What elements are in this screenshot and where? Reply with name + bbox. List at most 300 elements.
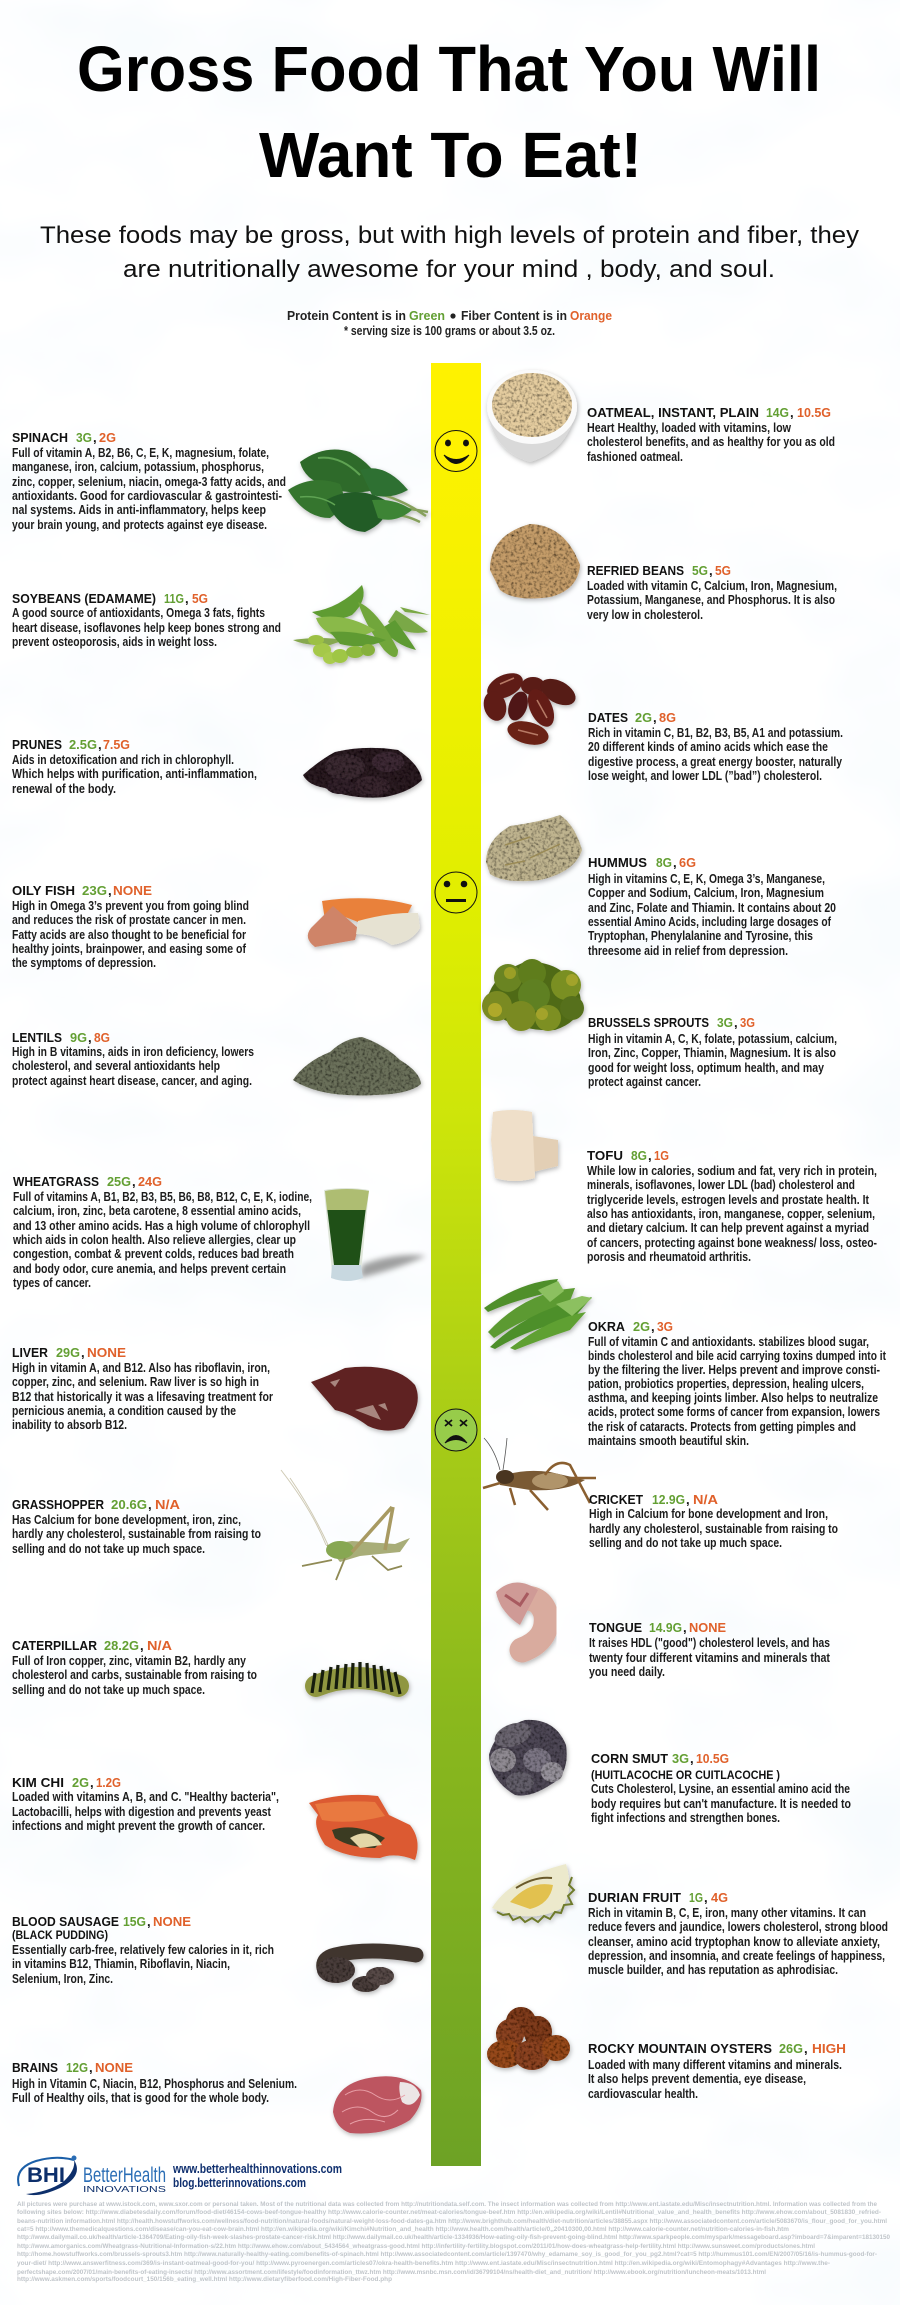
- heading: brussels sprouts: ,: [734, 1015, 738, 1030]
- text: oily fish: healthy joints, brainpower, and easing some of: [12, 942, 247, 956]
- heading: dates: 8G: [659, 710, 676, 725]
- text: durian: muscle builder, and has reputation as aphrodisiac.: [588, 1963, 838, 1977]
- heading: okra: [588, 1319, 673, 1334]
- heading: wheatgrass: 24G: [138, 1174, 162, 1189]
- heading: rocky mountain oysters: ROCKY MOUNTAIN OYSTERS: [588, 2041, 772, 2056]
- text: hummus: Copper and Sodium, Calcium, Iron, Magnesium: [588, 886, 824, 900]
- icon: cricket: [483, 1438, 596, 1510]
- text: okra: maintains smooth beautiful skin.: [588, 1434, 749, 1448]
- text: oily fish: Fatty acids are also thought to be beneficial for: [12, 928, 246, 942]
- website links: www.betterhealthinnovations.com: [172, 2161, 342, 2176]
- heading: liver: ,: [81, 1345, 85, 1360]
- sources fine print: All pictures were purchase at www.istock.com, www.sxor.com or personal taken. Most of the nutritional data was collected from http://nutritiondata.self.com. The insect information was collected from http://www.ent.iastate.edu/Misc/insectnutrition.html. Information was collected from the: [17, 2201, 877, 2208]
- heading: prunes: ,: [98, 737, 102, 752]
- legend: * serving size is 100 grams or about 3.5 oz.: [344, 324, 555, 338]
- text: lentils: cholesterol, and several antioxidants help: [12, 1059, 220, 1073]
- panel: oily fish: [12, 883, 420, 970]
- heading: oily fish: 23G: [82, 883, 107, 898]
- text: kim chi: Loaded with vitamins A, B, and C. "Healthy bacteria",: [12, 1790, 279, 1804]
- text: liver: inability to absorb B12.: [12, 1418, 127, 1432]
- panel: hummus: [486, 815, 836, 958]
- sources fine print: cat=5 http://www.themedicalquestions.com/disease/can-you-eat-cow-brain.html http://en.wikipedia.org/wiki/Kimchi#Nutrition_and_health http://www.health.com/health/article/0,,20410300,00.html http://www.calorie-counter.net/nutrition-calories-in-fish.htm: [17, 2226, 789, 2233]
- heading: corn smut: 3G: [672, 1751, 689, 1766]
- text: blood sausage: Essentially carb-free, relatively few calories in it, rich: [12, 1943, 274, 1957]
- logo: Better Health Innovations: BHI: [27, 2164, 65, 2187]
- heading: oatmeal: 10.5G: [797, 405, 831, 420]
- heading: blood sausage: [12, 1914, 191, 1942]
- text: caterpillar: [12, 1654, 257, 1697]
- heading: liver: NONE: [87, 1345, 126, 1360]
- heading: lentils: LENTILS: [12, 1030, 62, 1045]
- heading: dates: [588, 710, 676, 725]
- heading: spinach: ,: [93, 430, 97, 445]
- heading: liver: LIVER: [12, 1345, 49, 1360]
- text: blood sausage: in vitamins B12, Thiamin, Riboflavin, Niacin,: [12, 1957, 230, 1971]
- title: Gross Food That You Will: [77, 33, 821, 105]
- panel: oatmeal: [487, 370, 835, 464]
- text: liver: copper, zinc, and selenium. Raw liver is so high in: [12, 1375, 259, 1389]
- heading: brains: [12, 2060, 133, 2075]
- text: brussels sprouts: Iron, Zinc, Copper, Thiamin, Magnesium. It is also: [588, 1046, 836, 1060]
- panel: spinach: [12, 430, 428, 532]
- text: grasshopper: selling and do not take up much space.: [12, 1542, 205, 1556]
- sources fine print: http://www.askmen.com/sports/foodcourt_150/156b_eating_well.html http://www.dietaryfiberfood.com/High-Fiber-Food.php: [17, 2276, 392, 2283]
- text: caterpillar: cholesterol and carbs, sustainable from raising to: [12, 1668, 257, 1682]
- sources fine print: following sites below: http://www.diabetesdaily.com/forum/food-diet/46154-cows-beef-tongue-healthy http://www.calorie-counter.net/meat-calories/tongue-beef.htm http://en.wikipedia.org/wiki/Lentil#Nutritional_value_and_health_benefits http://www.ehow.com/about_5081830_refried-: [17, 2209, 881, 2216]
- heading: refried beans: REFRIED BEANS: [587, 563, 684, 578]
- panel: brains: [12, 2060, 422, 2133]
- icon: kim chi: [309, 1795, 418, 1860]
- heading: spinach: 2G: [99, 430, 116, 445]
- heading: tongue: NONE: [689, 1620, 726, 1635]
- heading: prunes: PRUNES: [12, 737, 62, 752]
- text: corn smut: fight infections and strengthen bones.: [591, 1811, 780, 1825]
- text: dates: Rich in vitamin C, B1, B2, B3, B5, A1 and potassium.: [588, 726, 843, 740]
- heading: caterpillar: [12, 1638, 173, 1653]
- text: soybeans: A good source of antioxidants, Omega 3 fats, fights: [12, 606, 265, 620]
- heading: grasshopper: N/A: [155, 1497, 181, 1512]
- icon: corn smut: [489, 1718, 567, 1796]
- text: prunes: renewal of the body.: [12, 782, 116, 796]
- icon: tofu: [491, 1110, 558, 1181]
- icon: fish: [308, 898, 420, 947]
- heading: blood sausage: BLOOD SAUSAGE: [12, 1914, 119, 1929]
- heading: blood sausage: ,: [147, 1914, 151, 1929]
- heading: lentils: 9G: [70, 1030, 87, 1045]
- text: spinach: Full of vitamin A, B2, B6, C, E, K, magnesium, folate,: [12, 446, 269, 460]
- text: brains: [12, 2077, 297, 2105]
- heading: lentils: [12, 1030, 110, 1045]
- text: dates: 20 different kinds of amino acids which ease the: [588, 740, 828, 754]
- icon: lentils: [293, 1037, 421, 1095]
- sources fine print: http://home.howstuffworks.com/brussels-sprouts3.htm http://www.naturally-healthy-eating.com/benefits-of-spinach.html http://www.associatedcontent.com/article/1397470/why_edamame_soy_is_good_for_you_pg2.html?cat=5 http://hummus101.com/EN/2007/05/16/is-hummus-good-for-: [17, 2251, 877, 2258]
- text: wheatgrass: [12, 1190, 312, 1290]
- text: wheatgrass: Full of vitamins A, B1, B2, B3, B5, B6, B8, B12, C, E, K, iodine,: [13, 1190, 312, 1204]
- heading: blood sausage: (BLACK PUDDING): [12, 1930, 108, 1942]
- panel: durian: [492, 1864, 888, 1977]
- icon: durian: [492, 1864, 574, 1922]
- text: tongue: you need daily.: [589, 1665, 665, 1679]
- text: oily fish: [12, 899, 249, 970]
- text: kim chi: infections and might prevent the growth of cancer.: [12, 1819, 265, 1833]
- heading: tongue: 14.9G: [649, 1620, 682, 1635]
- heading: blood sausage: NONE: [153, 1914, 191, 1929]
- heading: tofu: 8G: [631, 1148, 647, 1163]
- text: soybeans: heart disease, isoflavones help keep bones strong and: [12, 621, 281, 635]
- heading: cricket: 12.9G: [652, 1492, 685, 1507]
- heading: wheatgrass: [13, 1174, 162, 1189]
- icon: rocky mountain oysters: [487, 2007, 570, 2070]
- text: tongue: It raises HDL ("good") cholesterol levels, and has: [589, 1636, 830, 1650]
- heading: oily fish: NONE: [113, 883, 152, 898]
- text: cricket: High in Calcium for bone development and Iron,: [589, 1507, 828, 1521]
- heading: oily fish: [12, 883, 152, 898]
- heading: corn smut: ,: [690, 1751, 694, 1766]
- heading: wheatgrass: 25G: [107, 1174, 131, 1189]
- panel: brussels sprouts: [482, 959, 837, 1089]
- sources fine print: http://www.dailymail.co.uk/health/article-1364709/Eating-oily-fish-week-slashes-prostate-cancer-risk.html http://www.dailymail.co.uk/health/article-1334936/How-eating-oily-fish-prevent-going-blind.html http://www.sparkpeople.com/myspark/messageboard.asp?imboard=7&imparent=18130150: [17, 2234, 890, 2241]
- text: lentils: protect against heart disease, cancer, and aging.: [12, 1074, 252, 1088]
- text: brussels sprouts: [588, 1032, 837, 1089]
- text: spinach: manganese, iron, calcium, potassium, phosphorus,: [12, 460, 264, 474]
- legend: Orange: [570, 309, 612, 323]
- heading: refried beans: 5G: [715, 563, 731, 578]
- icon: dates: [480, 668, 580, 749]
- sources fine print: perfectshape.com/2007/01/main-benefits-of-eating-insects/ http://www.assortment.com/lifestyle/foodinformation_ttwz.htm http://www.msnbc.msn.com/id/36799104/ns/health-diet_and_nutrition/ http://www.ebook.org/nutrition/luncheon-meats/1013.html: [17, 2269, 766, 2276]
- heading: lentils: 8G: [94, 1030, 110, 1045]
- heading: caterpillar: CATERPILLAR: [12, 1638, 98, 1653]
- heading: oatmeal: ,: [790, 405, 794, 420]
- text: lentils: High in B vitamins, aids in iron deficiency, lowers: [12, 1045, 254, 1059]
- heading: brains: 12G: [66, 2060, 88, 2075]
- panel: rocky mountain oysters: [487, 2007, 846, 2101]
- text: refried beans: very low in cholesterol.: [587, 608, 703, 622]
- heading: spinach: [12, 430, 116, 445]
- heading: dates: ,: [653, 710, 657, 725]
- panel: prunes: [12, 737, 422, 798]
- legend: Fiber Content is in: [461, 309, 567, 323]
- icon: tongue: [496, 1582, 546, 1650]
- icon: edamame: [293, 585, 430, 664]
- heading: prunes: [12, 737, 130, 752]
- heading: oatmeal: [587, 405, 831, 420]
- heading: okra: 3G: [657, 1319, 673, 1334]
- heading: lentils: ,: [88, 1030, 92, 1045]
- heading: brussels sprouts: BRUSSELS SPROUTS: [588, 1015, 709, 1030]
- heading: durian: ,: [704, 1890, 708, 1905]
- heading: soybeans: 11G: [164, 591, 184, 606]
- heading: soybeans: 5G: [192, 591, 208, 606]
- heading: tofu: TOFU: [587, 1148, 623, 1163]
- heading: blood sausage: 15G: [123, 1914, 146, 1929]
- heading: caterpillar: N/A: [147, 1638, 173, 1653]
- heading: corn smut: 10.5G: [696, 1751, 729, 1766]
- text: grasshopper: hardly any cholesterol, sustainable from raising to: [12, 1527, 261, 1541]
- heading: grasshopper: 20.6G: [111, 1497, 147, 1512]
- text: refried beans: Potassium, Manganese, and Phosphorus. It is also: [587, 593, 835, 607]
- icon: sick face: [435, 1409, 477, 1451]
- text: oily fish: and reduces the risk of prostate cancer in men.: [12, 913, 246, 927]
- text: dates: lose weight, and lower LDL (”bad”) cholesterol.: [588, 769, 822, 783]
- panel: caterpillar: [12, 1638, 400, 1697]
- heading: kim chi: 2G: [72, 1775, 89, 1790]
- subtitle: [40, 222, 859, 283]
- icon: neutral face: [435, 872, 477, 913]
- text: blood sausage: [12, 1943, 274, 1986]
- heading: kim chi: ,: [90, 1775, 94, 1790]
- heading: grasshopper: GRASSHOPPER: [12, 1497, 105, 1512]
- text: dates: [588, 726, 843, 783]
- gradient scale bar: [431, 363, 481, 2166]
- heading: brussels sprouts: 3G: [717, 1015, 733, 1030]
- heading: cricket: N/A: [693, 1492, 719, 1507]
- text: tongue: twenty four different vitamins and minerals that: [589, 1651, 831, 1665]
- heading: kim chi: 1.2G: [96, 1775, 121, 1790]
- text: liver: B12 that historically it was a lifesaving treatment for: [12, 1390, 273, 1404]
- text: brains: Full of Healthy oils, that is good for the whole body.: [12, 2091, 269, 2105]
- panel: okra: [484, 1279, 887, 1448]
- text: wheatgrass: calcium, iron, zinc, beta carotene, 8 essential amino acids,: [13, 1204, 301, 1218]
- text: rocky mountain oysters: cardiovascular health.: [588, 2087, 698, 2101]
- heading: brains: BRAINS: [12, 2060, 58, 2075]
- heading: prunes: 2.5G: [69, 737, 97, 752]
- subtitle: are nutritionally awesome for your mind , body, and soul.: [123, 256, 775, 283]
- text: oatmeal: [587, 421, 835, 464]
- sources fine print: [17, 2201, 890, 2283]
- text: corn smut: Cuts Cholesterol, Lysine, an essential amino acid the: [591, 1782, 850, 1796]
- heading: tongue: [589, 1620, 726, 1635]
- text: spinach: [12, 446, 286, 532]
- text: hummus: High in vitamins C, E, K, Omega 3’s, Manganese,: [588, 872, 825, 886]
- text: soybeans: prevent osteoporosis, aids in weight loss.: [12, 635, 217, 649]
- text: cricket: [589, 1507, 838, 1550]
- heading: hummus: 6G: [679, 855, 696, 870]
- heading: wheatgrass: WHEATGRASS: [13, 1174, 99, 1189]
- heading: hummus: ,: [673, 855, 677, 870]
- heading: kim chi: KIM CHI: [12, 1775, 64, 1790]
- heading: durian: [588, 1890, 728, 1905]
- icon: spinach: [288, 450, 428, 532]
- text: spinach: antioxidants. Good for cardiovascular & gastrointesti-: [12, 489, 282, 503]
- heading: oily fish: OILY FISH: [12, 883, 75, 898]
- legend: [287, 309, 612, 338]
- icon: oatmeal bowl: [487, 370, 577, 462]
- heading: kim chi: [12, 1775, 121, 1790]
- heading: refried beans: ,: [709, 563, 713, 578]
- text: rocky mountain oysters: It also helps prevent dementia, eye disease,: [588, 2072, 806, 2086]
- legend: Protein Content is in: [287, 309, 406, 323]
- icon: blood sausage: [317, 1951, 416, 1992]
- sources fine print: http://www.amorganics.com/Wheatgrass-Nutritional-Information-s/22.htm http://www.ehow.com/about_5434564_wheatgrass-good.html http://infertility-fertility.blogspot.com/2011/01/how-does-wheatgrass-help-fertility.html http://www.sunsweet.com/products/ones.html: [17, 2243, 815, 2250]
- heading: brains: NONE: [95, 2060, 133, 2075]
- panel: kim chi: [12, 1775, 418, 1860]
- heading: liver: [12, 1345, 126, 1360]
- heading: tofu: ,: [648, 1148, 652, 1163]
- text: hummus: threesome aid in relief from depression.: [588, 944, 788, 958]
- text: hummus: [588, 872, 836, 958]
- heading: corn smut: [591, 1751, 780, 1782]
- panel: cricket: [483, 1438, 838, 1550]
- logo: Better Health Innovations: [18, 2156, 166, 2195]
- text: prunes: Aids in detoxification and rich in chlorophyll.: [12, 753, 234, 767]
- heading: oatmeal: 14G: [766, 405, 789, 420]
- sources fine print: beans-nutrition information.html http://health.howstuffworks.com/wellness/food-nutrition/natural-foods/natural-weight-loss-food-dates-ga.htm http://www.brighthub.com/health/diet-nutrition/articles/38855.aspx http://www.associatedcontent.com/article/5083670/is_flour_good_for_you.html: [17, 2218, 887, 2225]
- logo: Better Health Innovations: BetterHealth: [83, 2164, 166, 2187]
- text: liver: High in vitamin A, and B12. Also has riboflavin, iron,: [12, 1361, 270, 1375]
- panel: soybeans: [12, 585, 430, 664]
- text: lentils: [12, 1045, 254, 1088]
- text: tofu: porosis and rheumatoid arthritis.: [587, 1250, 751, 1264]
- heading: tofu: 1G: [654, 1148, 669, 1163]
- icon: wheatgrass glass: [324, 1188, 426, 1281]
- panel: dates: [480, 668, 843, 783]
- heading: wheatgrass: ,: [132, 1174, 136, 1189]
- text: cricket: selling and do not take up much space.: [589, 1536, 782, 1550]
- heading: okra: 2G: [633, 1319, 650, 1334]
- text: okra: [588, 1335, 887, 1448]
- logo: Better Health Innovations: INNOVATIONS: [83, 2185, 166, 2194]
- icon: happy face: [435, 430, 477, 472]
- heading: spinach: 3G: [76, 430, 92, 445]
- text: kim chi: Lactobacilli, helps with digestion and prevents yeast: [12, 1805, 272, 1819]
- text: oily fish: High in Omega 3’s prevent you from going blind: [12, 899, 249, 913]
- text: spinach: nal systems. Aids in anti-inflammatory, helps keep: [12, 503, 266, 517]
- sources fine print: your-diet/ http://www.answerfitness.com/369/is-instant-oatmeal-good-for-you/ http://www.pyroenergen.com/articles07/okra-health-benefits.htm http://www.ent.iastate.edu/Misc/insectnutrition.html http://en.wikipedia.org/wiki/Entomophagy#Advantages http://www.the-: [17, 2260, 830, 2267]
- heading: soybeans: SOYBEANS (EDAMAME): [12, 591, 156, 606]
- panel: blood sausage: [12, 1914, 416, 1992]
- text: grasshopper: Has Calcium for bone development, iron, zinc,: [12, 1513, 241, 1527]
- panel: lentils: [12, 1030, 421, 1095]
- text: spinach: zinc, copper, selenium, niacin, omega-3 fatty acids, and: [12, 475, 286, 489]
- icon: prunes: [303, 748, 422, 798]
- text: wheatgrass: congestion, combat & prevent colds, reduces bad breath: [13, 1247, 294, 1261]
- icon: brussels sprouts: [482, 959, 584, 1031]
- text: brains: High in Vitamin C, Niacin, B12, Phosphorus and Selenium.: [12, 2077, 297, 2091]
- heading: durian: 1G: [689, 1890, 703, 1905]
- heading: okra: OKRA: [588, 1319, 626, 1334]
- heading: hummus: [588, 855, 696, 870]
- subtitle: These foods may be gross, but with high levels of protein and fiber, they: [40, 222, 859, 249]
- title: [77, 33, 821, 191]
- heading: oatmeal: OATMEAL, INSTANT, PLAIN: [587, 405, 759, 420]
- text: oatmeal: fashioned oatmeal.: [587, 450, 683, 464]
- text: caterpillar: Full of Iron copper, zinc, vitamin B2, hardly any: [12, 1654, 246, 1668]
- heading: tongue: ,: [683, 1620, 687, 1635]
- icon: refried beans: [490, 524, 580, 598]
- panel: corn smut: [489, 1718, 851, 1825]
- text: liver: [12, 1361, 273, 1432]
- heading: rocky mountain oysters: HIGH: [812, 2041, 846, 2056]
- text: corn smut: [591, 1782, 851, 1825]
- text: tongue: [589, 1636, 831, 1679]
- heading: spinach: SPINACH: [12, 430, 68, 445]
- panel: liver: [12, 1345, 418, 1432]
- heading: okra: ,: [651, 1319, 655, 1334]
- icon: brains: [333, 2076, 422, 2133]
- text: hummus: essential Amino Acids, including large dosages of: [588, 915, 832, 929]
- heading: oily fish: ,: [108, 883, 112, 898]
- heading: rocky mountain oysters: ,: [804, 2041, 808, 2056]
- icon: okra: [484, 1279, 592, 1350]
- icon: grasshopper: [281, 1470, 410, 1580]
- panel: tofu: [491, 1110, 877, 1264]
- heading: rocky mountain oysters: 26G: [779, 2041, 803, 2056]
- heading: cricket: [589, 1492, 719, 1507]
- text: rocky mountain oysters: [588, 2058, 842, 2101]
- text: tofu: [587, 1164, 877, 1264]
- text: spinach: your brain young, and protects against eye disease.: [12, 518, 267, 532]
- website links: blog.betterinnovations.com: [173, 2175, 306, 2190]
- panel: tongue: [496, 1582, 831, 1679]
- heading: grasshopper: [12, 1497, 181, 1512]
- heading: brains: ,: [89, 2060, 93, 2075]
- panel: wheatgrass: [12, 1174, 426, 1290]
- heading: durian: 4G: [711, 1890, 728, 1905]
- text: prunes: Which helps with purification, anti-inflammation,: [12, 767, 257, 781]
- title: Want To Eat!: [259, 119, 642, 191]
- heading: cricket: ,: [686, 1492, 690, 1507]
- heading: durian: DURIAN FRUIT: [588, 1890, 681, 1905]
- text: durian: [588, 1906, 888, 1977]
- heading: caterpillar: ,: [140, 1638, 144, 1653]
- text: oatmeal: Heart Healthy, loaded with vitamins, low: [587, 421, 791, 435]
- text: brussels sprouts: protect against cancer.: [588, 1075, 701, 1089]
- text: corn smut: body requires but can't manufacture. It is needed to: [591, 1797, 851, 1811]
- text: wheatgrass: which aids in colon health. Also relieve allergies, clear up: [12, 1233, 296, 1247]
- icon: hummus: [486, 815, 582, 881]
- icon: liver: [311, 1367, 418, 1431]
- heading: hummus: HUMMUS: [588, 855, 647, 870]
- heading: grasshopper: ,: [148, 1497, 152, 1512]
- text: refried beans: Loaded with vitamin C, Calcium, Iron, Magnesium,: [587, 579, 837, 593]
- heading: hummus: 8G: [656, 855, 672, 870]
- heading: caterpillar: 28.2G: [104, 1638, 139, 1653]
- text: hummus: and Zinc, Folate and Thiamin. It contains about 20: [588, 901, 836, 915]
- text: wheatgrass: and body odor, cure anemia, and helps prevent certain: [13, 1262, 286, 1276]
- panel: refried beans: [490, 524, 837, 622]
- text: brussels sprouts: good for weight loss, optimum health, and may: [588, 1061, 824, 1075]
- heading: liver: 29G: [56, 1345, 80, 1360]
- text: rocky mountain oysters: Loaded with many different vitamins and minerals.: [588, 2058, 842, 2072]
- text: cricket: hardly any cholesterol, sustainable from raising to: [589, 1522, 838, 1536]
- heading: corn smut: CORN SMUT: [591, 1751, 668, 1766]
- text: dates: digestive process, a great energy booster, naturally: [588, 755, 842, 769]
- heading: dates: DATES: [588, 710, 628, 725]
- text: kim chi: [12, 1790, 279, 1833]
- website links: [172, 2161, 342, 2190]
- text: oily fish: the symptoms of depression.: [12, 956, 156, 970]
- heading: cricket: CRICKET: [589, 1492, 643, 1507]
- text: wheatgrass: and 13 other amino acids. Has a high volume of chlorophyll: [13, 1219, 310, 1233]
- heading: prunes: 7.5G: [103, 737, 130, 752]
- text: refried beans: [587, 579, 837, 622]
- text: soybeans: [12, 606, 281, 649]
- text: blood sausage: Selenium, Iron, Zinc.: [12, 1972, 113, 1986]
- text: prunes: [12, 753, 257, 796]
- heading: tofu: [587, 1148, 669, 1163]
- legend: Green: [409, 309, 445, 323]
- text: oatmeal: cholesterol benefits, and as healthy for you as old: [587, 435, 835, 449]
- text: brussels sprouts: High in vitamin A, C, K, folate, potassium, calcium,: [588, 1032, 837, 1046]
- heading: brussels sprouts: 3G: [740, 1015, 755, 1030]
- text: wheatgrass: types of cancer.: [13, 1276, 91, 1290]
- heading: refried beans: 5G: [692, 563, 708, 578]
- panel: grasshopper: [12, 1470, 410, 1580]
- text: liver: pernicious anemia, a condition caused by the: [12, 1404, 236, 1418]
- icon: caterpillar: [312, 1662, 400, 1694]
- heading: corn smut: (HUITLACOCHE OR CUITLACOCHE ): [591, 1770, 780, 1782]
- heading: tongue: TONGUE: [589, 1620, 642, 1635]
